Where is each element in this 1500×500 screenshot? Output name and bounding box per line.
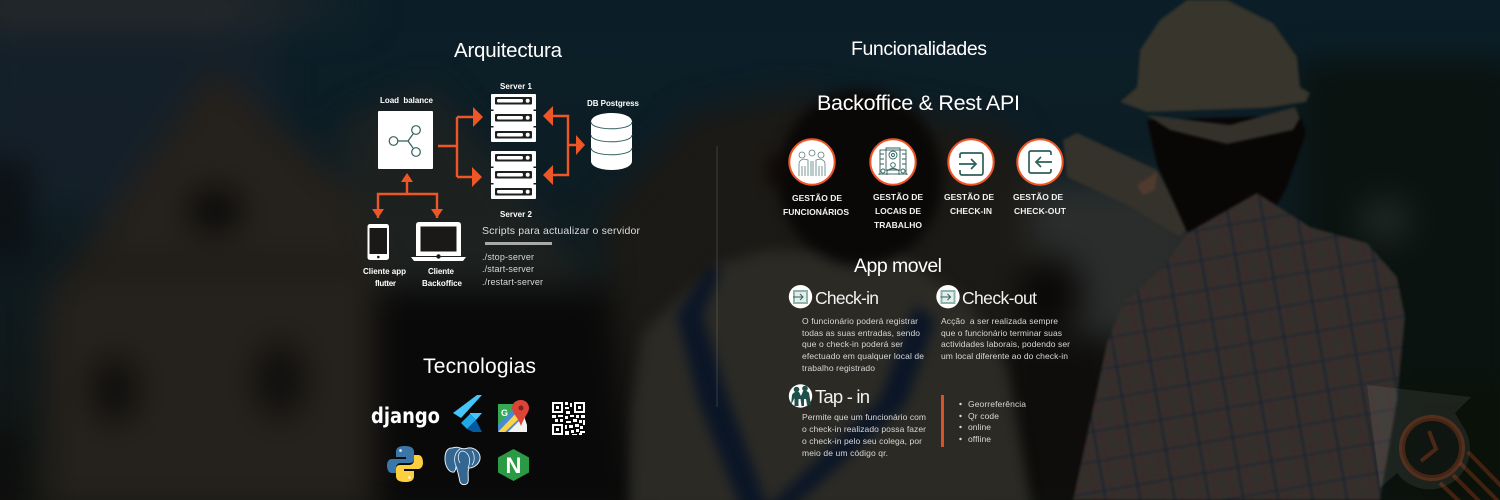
logo: qr code [552, 402, 585, 435]
feature: gestao de check-in: CHECK-IN [950, 206, 992, 216]
load balance [378, 96, 434, 169]
icon: employees [799, 150, 825, 176]
block: check-in: Check-in [815, 288, 879, 308]
feature: gestao de check-out: GESTÃO DE [1013, 192, 1063, 202]
load balance: Load balance [380, 96, 434, 105]
arrows: load balancer to servers [438, 107, 483, 187]
icon: check-in arrow [959, 153, 983, 175]
server scripts: Scripts para actualizar o servidor [482, 225, 640, 237]
block: check-in: O funcionário poderá registrar [802, 316, 918, 326]
block: check-in: que o check-in poderá ser [802, 339, 903, 349]
heading: Backoffice and Rest API: Backoffice & Rest API [817, 91, 1020, 115]
block: tap-in [789, 384, 926, 458]
plaid shirt [1073, 193, 1405, 500]
block: tap-in: meio de um código qr. [802, 448, 888, 458]
center worker [630, 250, 1032, 500]
feature list: offline [968, 434, 991, 444]
feature: gestao de locais de trabalho: GESTÃO DE [873, 192, 923, 202]
logo: python [387, 446, 423, 482]
client labels: Cliente [428, 267, 455, 276]
block: tap-in: Tap - in [815, 386, 870, 407]
arrows: clients to load balancer [372, 173, 443, 218]
database: DB Postgress [587, 99, 640, 108]
block: check-in [789, 285, 924, 373]
heading: Arquitectura: Arquitectura [454, 39, 563, 62]
feature list: online [968, 422, 991, 432]
block: tap-in: o check-in realizado possa fazer [802, 424, 926, 434]
client labels: flutter [375, 279, 396, 288]
feature: gestao de funcionarios: FUNCIONÁRIOS [783, 207, 849, 217]
server 2: Server 2 [500, 210, 533, 219]
icon: phone [368, 224, 389, 260]
logo: flutter [453, 395, 482, 432]
logo: google maps [498, 400, 529, 432]
block: check-out: actividades laborais, podendo ser [941, 339, 1070, 349]
icon: laptop [411, 222, 466, 261]
feature: gestao de funcionarios: GESTÃO DE [792, 193, 842, 203]
feature: gestao de check-in: GESTÃO DE [944, 192, 994, 202]
icon: workplace building [879, 148, 907, 175]
feature list [941, 395, 1026, 447]
client labels [363, 267, 463, 288]
block: check-in: todas as suas entradas, sendo [802, 328, 920, 338]
feature: gestao de check-out: CHECK-OUT [1014, 206, 1067, 216]
logo: django: django [371, 404, 440, 428]
feature: gestao de locais de trabalho: TRABALHO [874, 220, 922, 230]
logo: google maps: G [501, 408, 508, 418]
arrows: servers to database [543, 106, 585, 185]
server 2 [491, 151, 536, 219]
server 1 [491, 82, 536, 142]
block: check-out: que o funcionário terminar suas [941, 328, 1062, 338]
feature: gestao de check-out [1013, 139, 1067, 216]
client labels: Cliente app [363, 267, 406, 276]
heading: Funcionalidades: Funcionalidades [851, 38, 987, 60]
block: check-out: um local diferente ao do check-in [941, 351, 1068, 361]
decorative clock badge [1367, 385, 1500, 500]
server 1: Server 1 [500, 82, 533, 91]
icon: check-out arrow [1029, 151, 1052, 173]
right worker arm and blueprint [1063, 133, 1187, 237]
block: check-out [936, 285, 1070, 361]
server scripts: ./restart-server [482, 277, 543, 287]
block: check-out: Check-out [962, 288, 1037, 308]
feature: gestao de locais de trabalho: LOCAIS DE [875, 206, 921, 216]
logo: nginx: N [506, 453, 521, 478]
feature: gestao de funcionarios [783, 139, 849, 217]
icon: two people [791, 386, 811, 406]
block: check-out: Acção a ser realizada sempre [941, 316, 1058, 326]
heading: Tecnologias: Tecnologias [423, 355, 536, 378]
logo: nginx [498, 449, 529, 481]
block: tap-in: Permite que um funcionário com [802, 412, 926, 422]
block: check-in: efectuado em qualquer local de [802, 351, 924, 361]
feature: gestao de locais de trabalho [870, 139, 923, 230]
hard hat [1120, 0, 1310, 112]
vertical divider [716, 146, 718, 407]
feature list: Georreferência [968, 399, 1026, 409]
feature list: Qr code [968, 411, 999, 421]
icon: check-in [793, 290, 808, 304]
logo: postgresql [445, 447, 480, 485]
icon: share nodes [389, 126, 420, 156]
feature: gestao de check-in [944, 139, 994, 216]
database [587, 99, 640, 170]
block: check-in: trabalho registrado [802, 363, 875, 373]
server scripts [482, 225, 640, 287]
client labels: Backoffice [422, 279, 463, 288]
server scripts: ./start-server [482, 264, 534, 274]
right worker head [1147, 115, 1306, 232]
heading: App movel: App movel [854, 255, 942, 277]
block: tap-in: o check-in pelo seu colega, por [802, 436, 922, 446]
server scripts: ./stop-server [482, 252, 534, 262]
icon: check-out [940, 290, 956, 304]
